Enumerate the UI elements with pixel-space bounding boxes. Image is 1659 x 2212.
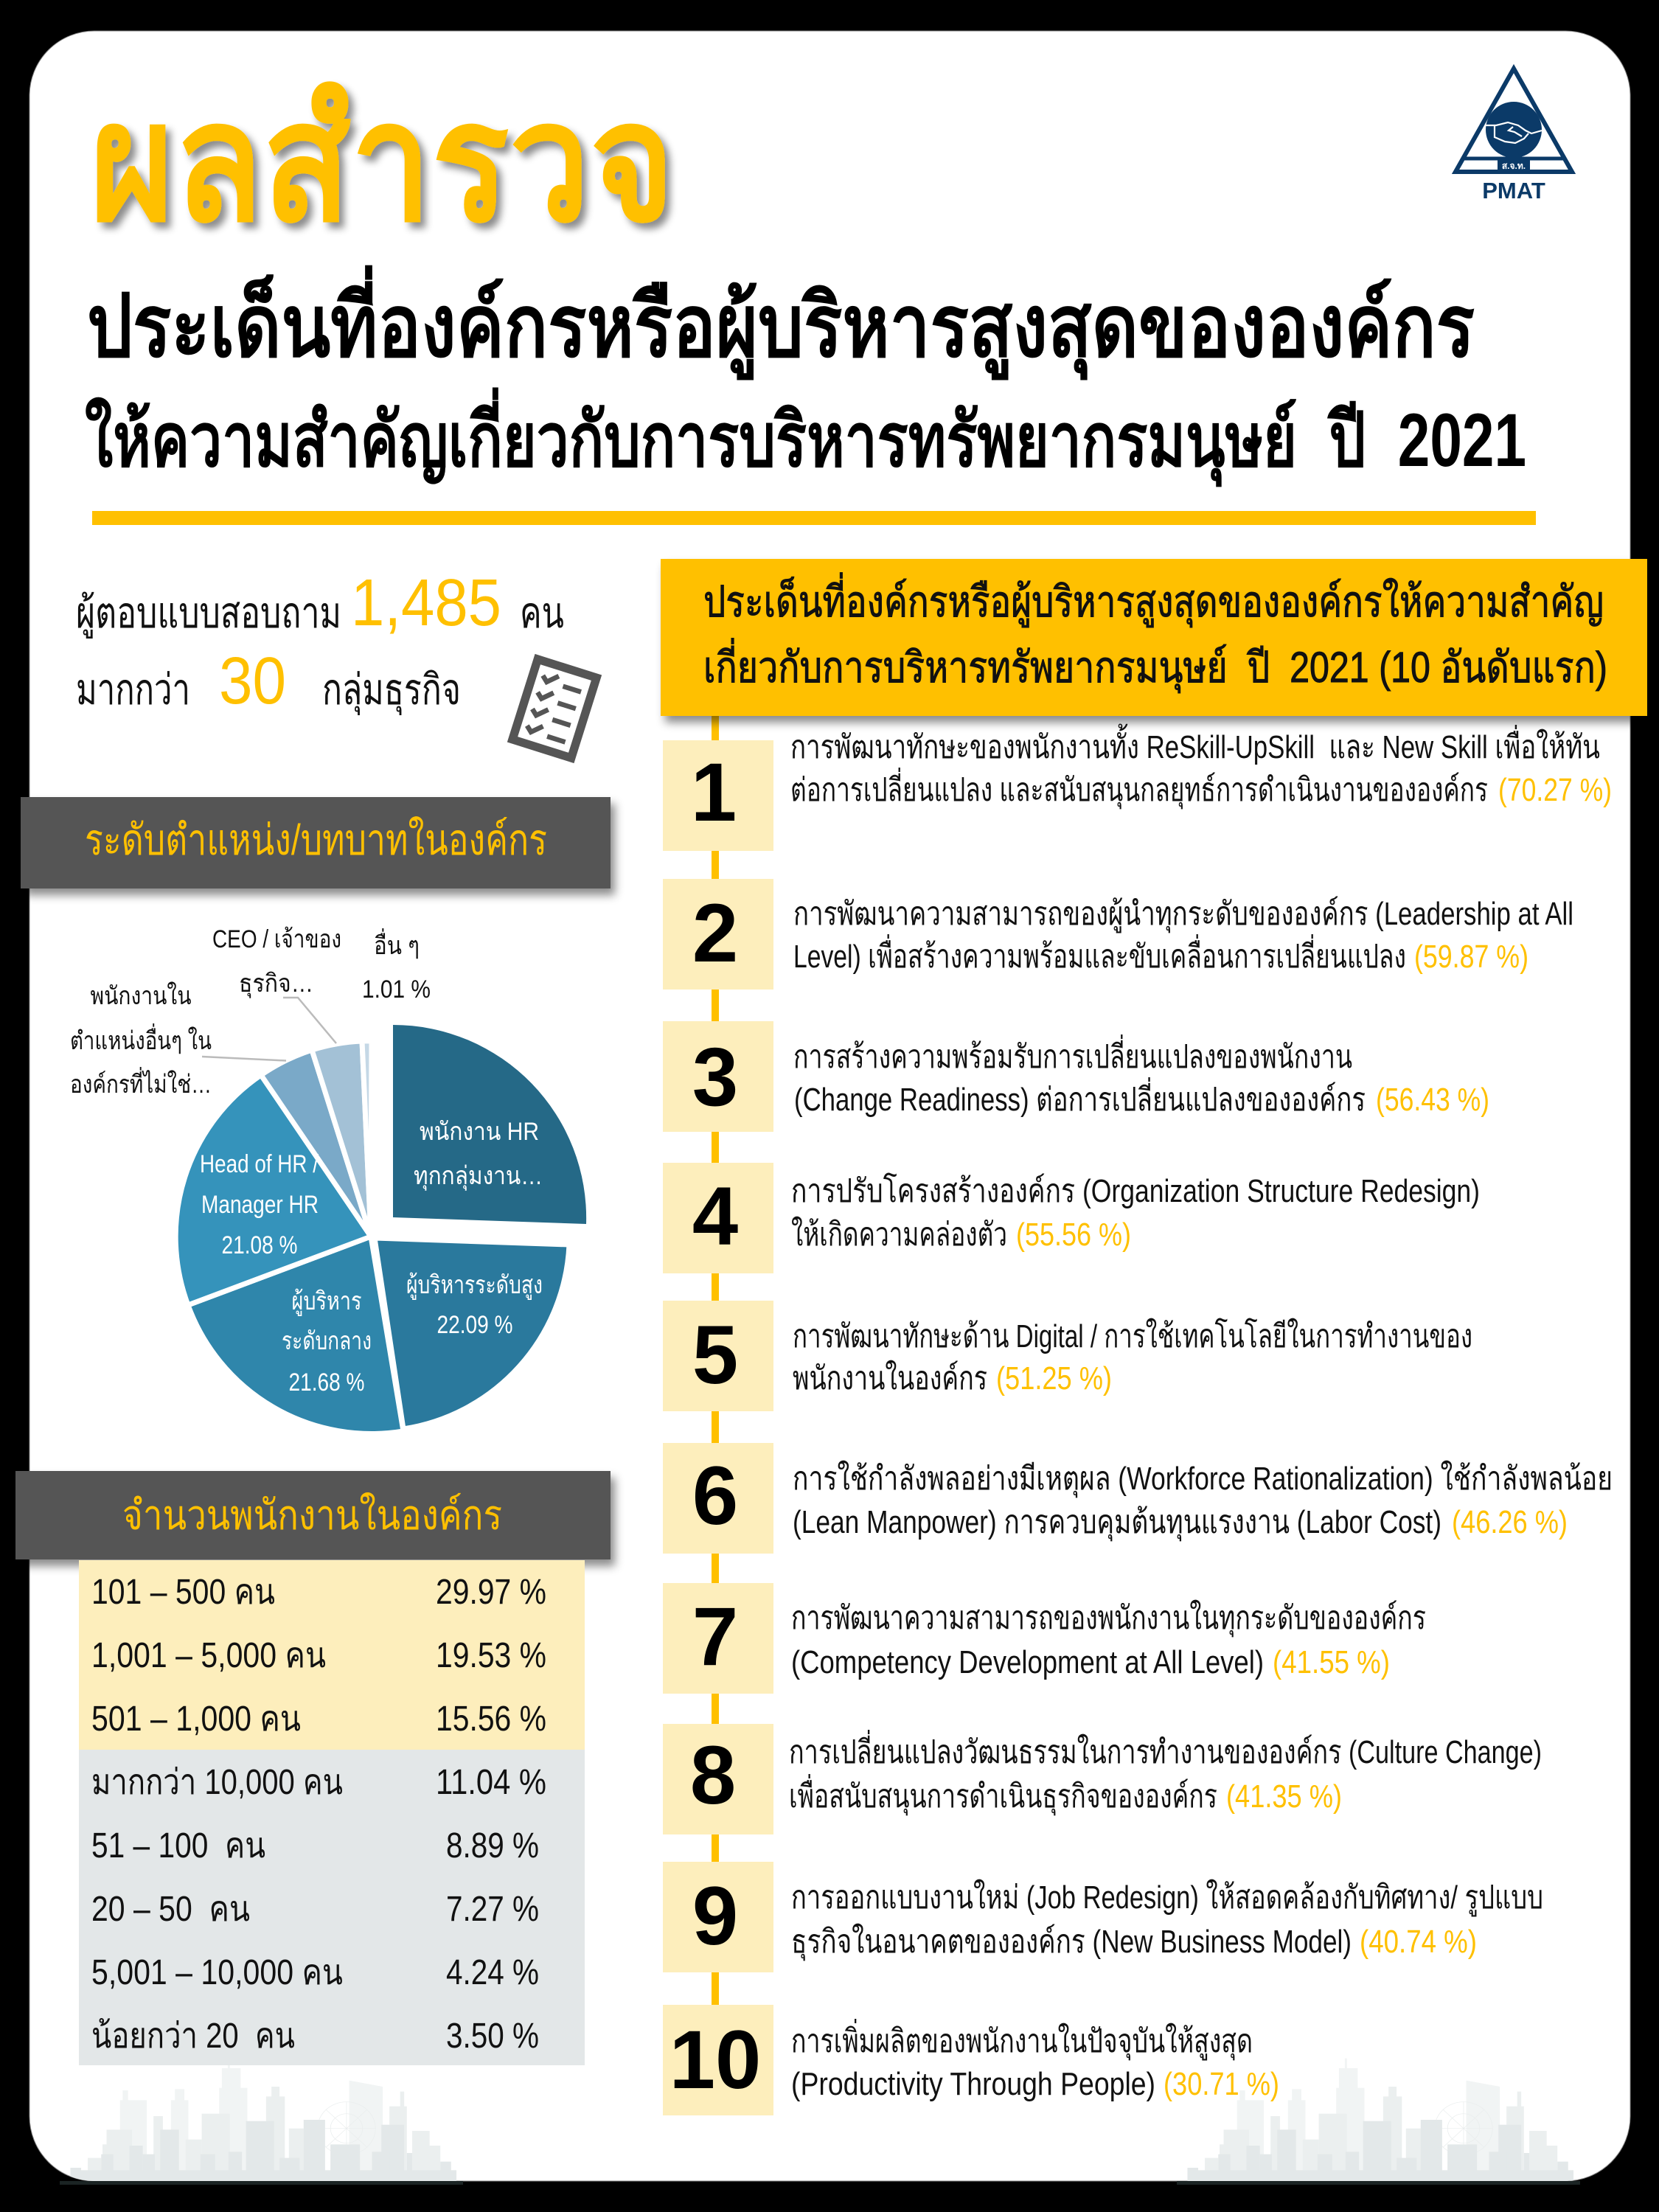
rank 7: 7 bbox=[692, 1590, 738, 1683]
label: senior executives bbox=[406, 1271, 543, 1339]
slice: middle managers bbox=[188, 1237, 403, 1434]
label: senior executives: ผู้บริหารระดับสูง bbox=[406, 1271, 543, 1300]
label: middle managers: ผู้บริหาร bbox=[292, 1287, 361, 1316]
label: other staff bbox=[70, 981, 212, 1099]
rank 1 bbox=[663, 723, 1612, 851]
label: head of HR: Head of HR / bbox=[200, 1150, 319, 1178]
label: HR staff: พนักงาน HR bbox=[420, 1118, 539, 1146]
row 5: 51 – 100 คน bbox=[91, 1826, 265, 1865]
rank 10 bbox=[663, 2005, 1279, 2115]
panel heading: number of employees: จำนวนพนักงานในองค์กร bbox=[122, 1492, 502, 1538]
rank 10: 10 bbox=[669, 2014, 761, 2106]
label: senior executives: 22.09 % bbox=[437, 1311, 513, 1339]
row 3 bbox=[91, 1700, 546, 1739]
title: survey headline: ผลสำรวจ bbox=[90, 69, 675, 255]
rank 3: (Change Readiness) ต่อการเปลี่ยนแปลงขององค์กร bbox=[794, 1077, 1366, 1118]
rank 5: 5 bbox=[692, 1309, 738, 1401]
row 7 bbox=[91, 1953, 539, 1992]
rank 2 bbox=[663, 879, 1573, 990]
row 4: 11.04 % bbox=[436, 1763, 546, 1802]
rank 8: (41.35 %) bbox=[1226, 1778, 1342, 1815]
label: middle managers: 21.68 % bbox=[289, 1368, 364, 1397]
rank 4: ให้เกิดความคล่องตัว bbox=[791, 1216, 1007, 1253]
row 8 bbox=[91, 2017, 539, 2056]
skyline: left decorative city bbox=[60, 2059, 463, 2185]
rank 5 bbox=[663, 1301, 1472, 1411]
row 7: 5,001 – 10,000 คน bbox=[91, 1953, 343, 1992]
stat: respondents: ผู้ตอบแบบสอบถาม bbox=[76, 589, 341, 639]
rank 4: 4 bbox=[692, 1170, 738, 1262]
label: other bbox=[362, 928, 431, 1004]
rank 4: การปรับโครงสร้างองค์กร (Organization Structure Redesign) bbox=[791, 1172, 1480, 1209]
rank 7: (41.55 %) bbox=[1273, 1644, 1390, 1680]
slice: CEO bbox=[312, 1041, 371, 1237]
label: head of HR: 21.08 % bbox=[221, 1231, 298, 1259]
row 4: มากกว่า 10,000 คน bbox=[91, 1763, 343, 1802]
row 1 bbox=[91, 1573, 546, 1612]
slice: HR staff bbox=[393, 1025, 586, 1224]
rank 8: 8 bbox=[690, 1729, 736, 1821]
rank 5: (51.25 %) bbox=[996, 1360, 1112, 1397]
label: other staff: พนักงานใน bbox=[90, 981, 192, 1010]
rank 9: ธุรกิจในอนาคตขององค์กร (New Business Model) bbox=[791, 1923, 1352, 1961]
rank 3: 3 bbox=[692, 1031, 738, 1123]
row 2: 19.53 % bbox=[436, 1636, 546, 1675]
stat: business groups bbox=[76, 644, 461, 718]
rank 10: (30.71 %) bbox=[1164, 2066, 1279, 2102]
label: other: อื่น ๆ bbox=[374, 928, 420, 960]
label: head of HR: Manager HR bbox=[201, 1191, 319, 1219]
rank 7: การพัฒนาความสามารถของพนักงานในทุกระดับขององค์กร bbox=[791, 1599, 1426, 1638]
row 2 bbox=[91, 1636, 546, 1675]
slice: other staff bbox=[261, 1050, 371, 1237]
row 8: น้อยกว่า 20 คน bbox=[91, 2017, 295, 2056]
leader lines bbox=[202, 998, 336, 1060]
rank 3: การสร้างความพร้อมรับการเปลี่ยนแปลงของพนักงาน bbox=[793, 1034, 1352, 1075]
row 5 bbox=[91, 1826, 539, 1865]
rank 1: (70.27 %) bbox=[1498, 772, 1612, 808]
row 2: 1,001 – 5,000 คน bbox=[91, 1636, 326, 1675]
rank 1: 1 bbox=[691, 746, 737, 838]
rank 2: 2 bbox=[692, 887, 738, 979]
panel heading: position level bbox=[21, 797, 611, 888]
panel heading: number of employees bbox=[15, 1471, 611, 1559]
logo: PMAT: ส.จ.ท. bbox=[1502, 161, 1526, 171]
rank 6: (46.26 %) bbox=[1452, 1504, 1568, 1540]
row 1: 29.97 % bbox=[436, 1573, 546, 1612]
pie chart: position shares bbox=[70, 925, 586, 1434]
table: employee counts bbox=[79, 1560, 585, 2065]
rank 9: (40.74 %) bbox=[1360, 1924, 1477, 1960]
rank 9: 9 bbox=[692, 1870, 738, 1962]
slice: other bbox=[362, 1041, 372, 1237]
label: other staff: ตำแหน่งอื่นๆ ใน bbox=[70, 1023, 212, 1055]
rank 2: Level) เพื่อสร้างความพร้อมและขับเคลื่อนการเปลี่ยนแปลง bbox=[793, 933, 1406, 975]
stat: business groups: 30 bbox=[219, 644, 286, 718]
logo: PMAT bbox=[1455, 69, 1572, 204]
rank 7: (Competency Development at All Level) bbox=[791, 1644, 1264, 1680]
rank 2: (59.87 %) bbox=[1414, 939, 1528, 975]
rank 6: (Lean Manpower) การควบคุมต้นทุนแรงงาน (Labor Cost) bbox=[793, 1504, 1441, 1542]
row 6: 20 – 50 คน bbox=[91, 1890, 250, 1929]
row 6: 7.27 % bbox=[446, 1890, 539, 1929]
row 3: 15.56 % bbox=[436, 1700, 546, 1739]
label: HR staff bbox=[414, 1118, 543, 1191]
rank 3 bbox=[663, 1021, 1489, 1132]
label: HR staff: ทุกกลุ่มงาน… bbox=[414, 1162, 543, 1191]
label: other: 1.01 % bbox=[362, 975, 431, 1004]
rank 5: พนักงานในองค์กร bbox=[793, 1360, 987, 1397]
row 7: 4.24 % bbox=[446, 1953, 539, 1992]
rank 6: 6 bbox=[692, 1450, 738, 1542]
rank 6 bbox=[663, 1443, 1613, 1554]
row 3: 501 – 1,000 คน bbox=[91, 1700, 301, 1739]
rank 4: (55.56 %) bbox=[1016, 1217, 1131, 1253]
row 1: 101 – 500 คน bbox=[91, 1573, 275, 1612]
label: head of HR bbox=[200, 1150, 319, 1259]
skyline: right decorative city bbox=[1177, 2059, 1580, 2185]
row 5: 8.89 % bbox=[446, 1826, 539, 1865]
stat: business groups: กลุ่มธุรกิจ bbox=[322, 666, 461, 716]
label: CEO: ธุรกิจ… bbox=[239, 970, 313, 998]
rank 8: เพื่อสนับสนุนการดำเนินธุรกิจขององค์กร bbox=[789, 1773, 1217, 1816]
slice: head of HR bbox=[175, 1075, 371, 1305]
rank 7 bbox=[663, 1583, 1426, 1694]
label: other staff: องค์กรที่ไม่ใช่… bbox=[70, 1067, 212, 1099]
panel heading: position level: ระดับตำแหน่ง/บทบาทในองค์กร bbox=[85, 815, 547, 864]
stat: respondents: คน bbox=[520, 589, 564, 637]
stat: respondents bbox=[76, 566, 564, 640]
panel heading: top 10 issues bbox=[661, 559, 1647, 716]
row 6 bbox=[91, 1890, 539, 1929]
rank 8 bbox=[663, 1724, 1542, 1834]
stat: business groups: มากกว่า bbox=[76, 666, 190, 714]
icon: checklist bbox=[512, 659, 597, 758]
label: middle managers bbox=[282, 1287, 372, 1397]
rank 3: (56.43 %) bbox=[1376, 1082, 1489, 1118]
icon: handshake bbox=[1486, 122, 1542, 143]
logo: PMAT: PMAT bbox=[1482, 178, 1545, 204]
slice: senior executives bbox=[375, 1238, 569, 1429]
rank 9 bbox=[663, 1862, 1543, 1972]
rank 10: การเพิ่มผลิตของพนักงานในปัจจุบันให้สูงสุด bbox=[791, 2018, 1253, 2061]
label: CEO bbox=[212, 925, 341, 998]
rank 4 bbox=[663, 1163, 1480, 1273]
rank 10: (Productivity Through People) bbox=[791, 2066, 1155, 2102]
label: middle managers: ระดับกลาง bbox=[282, 1327, 372, 1355]
row 8: 3.50 % bbox=[446, 2017, 539, 2056]
label: CEO: CEO / เจ้าของ bbox=[212, 925, 341, 953]
row 4 bbox=[91, 1763, 546, 1802]
stat: respondents: 1,485 bbox=[351, 566, 501, 640]
